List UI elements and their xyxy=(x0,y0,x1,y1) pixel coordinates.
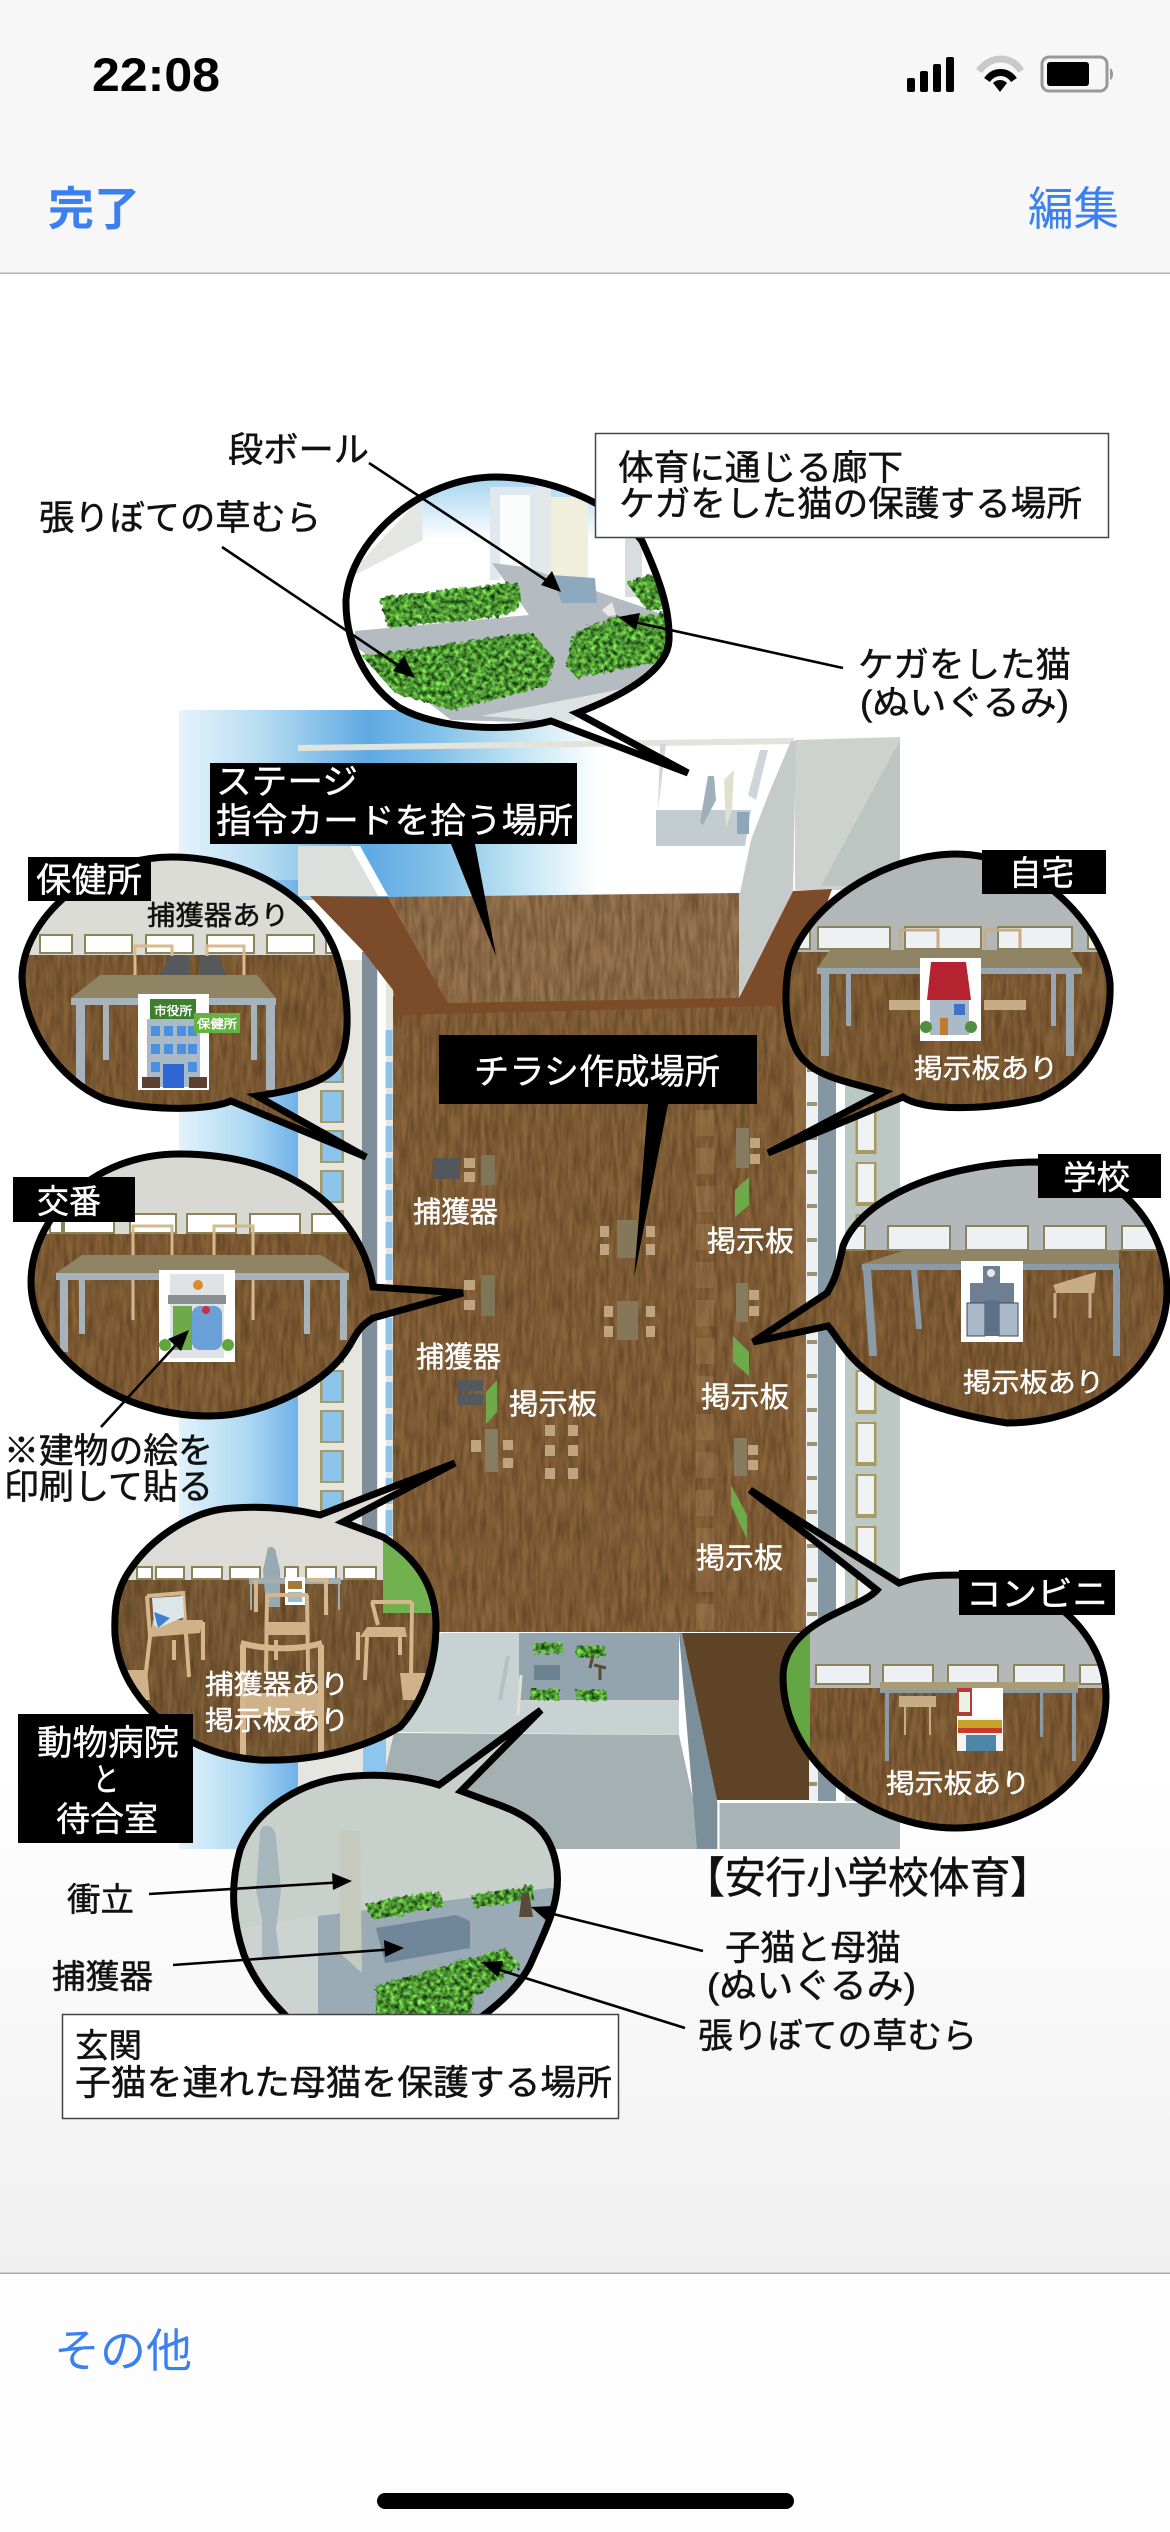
caption: entrance: 子猫を連れた母猫を保護する場所 xyxy=(75,2064,612,2103)
label: hedge bottom: 張りぼての草むら xyxy=(698,2017,977,2056)
screen xyxy=(340,1830,362,1973)
caption: corridor: ケガをした猫の保護する場所 xyxy=(619,485,1082,524)
tag: convenience store: コンビニ xyxy=(966,1576,1108,1614)
tag: animal hospital and waiting room: 動物病院 xyxy=(37,1724,179,1763)
stage rim xyxy=(310,889,832,1015)
bottom toolbar xyxy=(0,2272,1170,2532)
furniture: tables, chairs, traps and notice boards xyxy=(433,1128,760,1539)
status time: 22:08 xyxy=(92,48,220,101)
arrow: screen xyxy=(149,1873,352,1894)
back table xyxy=(250,1579,340,1610)
note: print building pictures xyxy=(4,1432,213,1507)
corridor props: box xyxy=(551,575,597,603)
page background xyxy=(0,274,1170,2273)
person figure xyxy=(256,1826,281,1958)
corridor props: hedges xyxy=(362,575,670,710)
stage opening and upper walls xyxy=(298,737,900,896)
icon: signal xyxy=(907,57,954,92)
poster: store xyxy=(957,1688,1003,1751)
home indicator xyxy=(377,2493,794,2509)
caption: entrance: 玄関 xyxy=(75,2027,142,2064)
tag: animal hospital and waiting room xyxy=(18,1714,193,1843)
label: hedge top: 張りぼての草むら xyxy=(39,499,321,538)
floor label: board right 3: 掲示板 xyxy=(696,1542,783,1575)
arrow: injured cat xyxy=(618,613,843,668)
poster: city hall: 保健所 xyxy=(197,1017,237,1031)
note: has board: 掲示板あり xyxy=(963,1368,1104,1398)
arrow: poster note xyxy=(101,1330,189,1427)
tag: school: 学校 xyxy=(1063,1159,1130,1196)
panel: home bubble xyxy=(760,850,1115,1157)
caption: stage: ステージ xyxy=(216,763,358,802)
poster: house xyxy=(920,958,981,1041)
icon: battery xyxy=(1042,57,1113,91)
nav button: edit: 編集 xyxy=(1028,183,1119,235)
note: has board: 掲示板あり xyxy=(914,1054,1058,1084)
toolbar button: more: その他 xyxy=(54,2325,192,2377)
label: screen: 衝立 xyxy=(67,1881,134,1918)
caption: flyer area xyxy=(439,1035,757,1104)
label: kitten and mother cat: 子猫と母猫 xyxy=(725,1929,901,1968)
label: kitten and mother cat xyxy=(707,1929,916,2006)
arrow: hedge top xyxy=(222,547,415,678)
table xyxy=(862,1250,1119,1355)
note: has trap: 捕獲器あり xyxy=(147,901,289,931)
chair seats xyxy=(118,1620,430,1716)
tag: health centre: 保健所 xyxy=(36,862,142,900)
stage side wall xyxy=(739,891,793,998)
caption: stage: 指令カードを拾う場所 xyxy=(216,802,573,841)
panel: police box bubble xyxy=(25,1150,470,1424)
panel: convenience store bubble xyxy=(745,1480,1115,1833)
floor label: trap 2: 捕獲器 xyxy=(416,1341,501,1374)
tag: animal hospital and waiting room: と xyxy=(93,1761,119,1798)
nav button: done: 完了 xyxy=(48,183,140,235)
poster on back table xyxy=(285,1577,305,1605)
note: print building pictures: 印刷して貼る xyxy=(4,1468,213,1507)
tag: school xyxy=(1038,1154,1161,1198)
table xyxy=(880,1682,1078,1761)
poster: police box xyxy=(159,1270,235,1362)
note: has trap: 捕獲器あり xyxy=(205,1670,349,1700)
panel: entrance bubble xyxy=(230,1707,561,2014)
note: print building pictures: ※建物の絵を xyxy=(4,1432,213,1471)
main gym floor xyxy=(393,996,806,1632)
label: cardboard box: 段ボール xyxy=(228,431,369,470)
panel: animal hospital bubble xyxy=(110,1460,460,1770)
floor label: board right 1: 掲示板 xyxy=(707,1225,794,1258)
distant chairs xyxy=(134,944,246,975)
tag: home xyxy=(982,850,1106,894)
sky backdrop xyxy=(179,710,899,1849)
arrow: mother and kitten xyxy=(531,1906,703,1951)
tag: police box xyxy=(13,1177,135,1222)
caption: corridor: 体育に通じる廊下 xyxy=(618,449,903,488)
poster: school xyxy=(961,1261,1023,1342)
callout: stage pointer xyxy=(451,844,496,956)
chairs xyxy=(145,1580,412,1680)
cats xyxy=(519,1893,533,1917)
caption: flyer area: チラシ作成場所 xyxy=(474,1053,720,1092)
poster: city hall xyxy=(138,994,240,1090)
stage floor xyxy=(388,893,739,1003)
top navigation bar xyxy=(0,0,1170,274)
hedges xyxy=(365,1885,534,2030)
label: injured cat: ケガをした猫 xyxy=(858,646,1071,685)
tag: home: 自宅 xyxy=(1009,855,1074,893)
floor label: board left: 掲示板 xyxy=(509,1388,597,1421)
front chair xyxy=(241,1643,322,1760)
table xyxy=(56,1255,349,1352)
entrance hall floor xyxy=(367,1633,900,1849)
picture on chair xyxy=(152,1596,184,1628)
arrow: hedge bottom xyxy=(481,1961,685,2028)
building overhead view xyxy=(179,710,900,1850)
right wall with windows xyxy=(806,950,900,1810)
tag: police box: 交番 xyxy=(37,1183,101,1220)
poster: city hall: 市役所 xyxy=(154,1003,192,1018)
label: injured cat xyxy=(858,646,1071,723)
tag: animal hospital and waiting room: 待合室 xyxy=(56,1801,158,1839)
caption: stage xyxy=(210,763,577,844)
panel: school bubble xyxy=(750,1155,1170,1430)
label: injured cat: (ぬいぐるみ) xyxy=(860,684,1069,723)
left wall with windows xyxy=(298,952,393,1850)
entrance props xyxy=(500,1643,606,1715)
corridor props: cat xyxy=(602,602,616,616)
note: has board: 掲示板あり xyxy=(886,1769,1030,1799)
caption: corridor xyxy=(596,434,1108,538)
arrow: cardboard box xyxy=(369,463,561,592)
panel: health centre bubble xyxy=(20,850,370,1160)
caption: entrance xyxy=(62,2014,618,2118)
panel: corridor bubble xyxy=(340,470,690,780)
trap box xyxy=(376,1915,470,1963)
note: has board: 掲示板あり xyxy=(205,1706,349,1736)
arrow: trap xyxy=(173,1940,404,1965)
floor label: board right 2: 掲示板 xyxy=(701,1381,789,1414)
callout: flyer pointer xyxy=(634,1104,668,1278)
table xyxy=(817,950,1082,1056)
icon: wifi xyxy=(979,59,1021,92)
title: school gym: 【安行小学校体育】 xyxy=(684,1855,1051,1903)
person figure xyxy=(263,1547,280,1607)
floor label: trap 1: 捕獲器 xyxy=(413,1196,498,1229)
label: kitten and mother cat: (ぬいぐるみ) xyxy=(707,1967,916,2006)
table xyxy=(71,975,276,1090)
corridor floor xyxy=(355,563,666,723)
label: trap: 捕獲器 xyxy=(52,1958,153,1995)
